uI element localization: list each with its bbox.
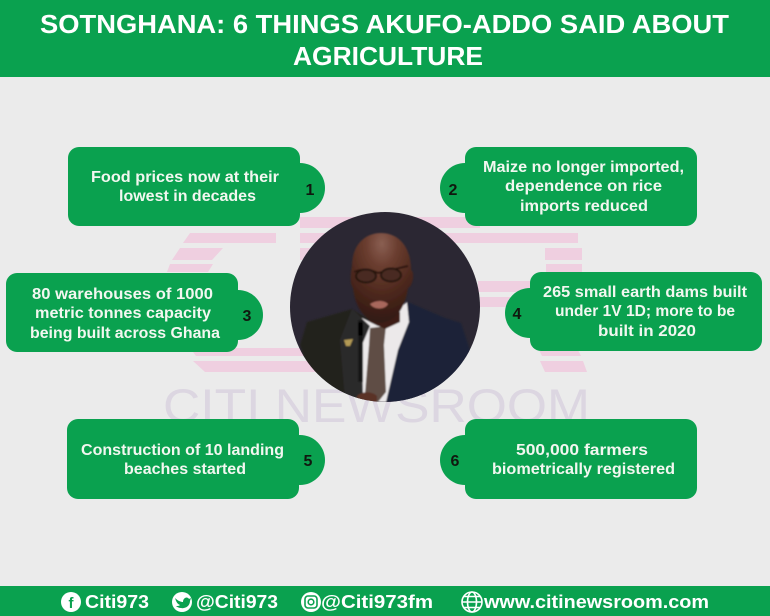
card 1: food prices: Food prices now at their: [91, 169, 279, 186]
card 6: farmers registered: [440, 419, 697, 499]
card 3: warehouses: 3: [243, 308, 252, 325]
card 1: food prices: [68, 147, 325, 226]
twitter handle: @Citi973: [196, 592, 278, 612]
card 3: warehouses: [6, 273, 263, 352]
card 2: maize and rice: 2: [449, 182, 458, 199]
card 3: warehouses: metric tonnes capacity: [35, 305, 211, 322]
card 6: farmers registered: 6: [451, 453, 460, 470]
card 2: maize and rice: dependence on rice: [505, 178, 662, 195]
card 2: maize and rice: Maize no longer imported,: [483, 159, 684, 176]
portrait: Akufo-Addo: [290, 212, 480, 404]
card 5: landing beaches: [67, 419, 325, 499]
facebook handle: f: [68, 595, 74, 612]
card 2: maize and rice: imports reduced: [520, 198, 648, 215]
title: SOTNGHANA: 6 THINGS AKUFO-ADDO SAID ABOUT: [40, 9, 729, 39]
card 4: earth dams: built in 2020: [598, 323, 696, 340]
card 6: farmers registered: 500,000 farmers: [516, 442, 648, 459]
footer bar: [0, 586, 770, 616]
website: www.citinewsroom.com: [483, 592, 709, 612]
watermark: Citi Newsroom logo: [163, 217, 590, 432]
card 1: food prices: 1: [306, 182, 315, 199]
card 3: warehouses: being built across Ghana: [30, 325, 220, 342]
card 5: landing beaches: beaches started: [124, 461, 246, 478]
watermark: Citi Newsroom logo: CITI NEWSROOM: [163, 379, 590, 432]
title: [40, 9, 729, 71]
card 5: landing beaches: Construction of 10 landing: [81, 442, 284, 459]
title: AGRICULTURE: [293, 41, 483, 71]
facebook handle: [61, 592, 149, 612]
card 4: earth dams: 4: [513, 306, 522, 323]
card 4: earth dams: 265 small earth dams built: [543, 284, 747, 301]
card 6: farmers registered: biometrically registered: [492, 461, 675, 478]
card 5: landing beaches: 5: [304, 453, 313, 470]
card 1: food prices: lowest in decades: [119, 188, 256, 205]
card 2: maize and rice: [440, 147, 697, 226]
instagram handle: @Citi973fm: [321, 592, 433, 612]
header banner: [0, 0, 770, 77]
card 3: warehouses: 80 warehouses of 1000: [32, 286, 213, 303]
card 4: earth dams: under 1V 1D; more to be: [555, 303, 735, 320]
facebook handle: Citi973: [85, 592, 149, 612]
card 4: earth dams: [505, 272, 762, 351]
